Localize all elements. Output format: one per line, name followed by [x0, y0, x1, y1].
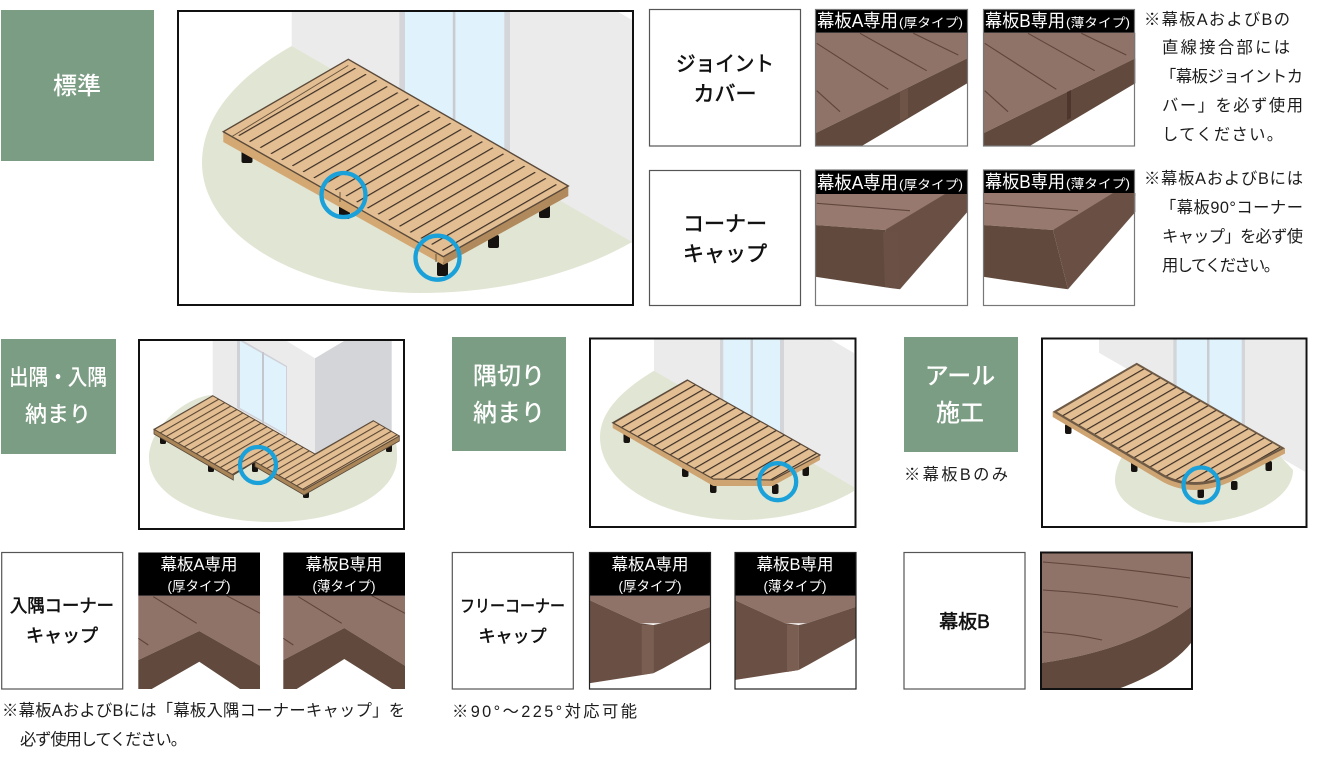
- box: フリーコーナーキャップ: キャップ: [478, 627, 546, 646]
- label: 出隅・入隅納まり: [1, 339, 116, 454]
- thumb: inner corner B: (薄タイプ): [312, 579, 376, 594]
- ring: joint: [322, 173, 366, 217]
- thumb: joint B: 幕板B専用: [985, 11, 1065, 31]
- box: 幕板B: 幕板B: [939, 611, 990, 633]
- thumb: joint B: [983, 10, 1135, 146]
- box: ジョイントカバー: [650, 10, 800, 146]
- thumb: joint A: (厚タイプ): [899, 16, 963, 30]
- thumb: inner corner B: [283, 552, 405, 689]
- note: joint cover: 「幕板ジョイントカ: [1160, 68, 1303, 86]
- wall: [1099, 339, 1305, 472]
- thumb: inner corner A: (厚タイプ): [168, 579, 230, 594]
- label: アール施工: [904, 337, 1018, 452]
- panel: chamfered deck illustration: [590, 338, 856, 527]
- wall: [213, 341, 392, 454]
- box: フリーコーナーキャップ: [452, 552, 573, 689]
- thumb: joint B: (薄タイプ): [1066, 15, 1130, 30]
- thumb: free corner A: (厚タイプ): [618, 579, 682, 594]
- ring: corner: [416, 236, 460, 280]
- panel: standard deck illustration: [178, 11, 633, 305]
- ground: [600, 371, 854, 520]
- feet: [624, 433, 809, 494]
- note: joint cover: [1144, 11, 1303, 144]
- box: 幕板B: [904, 552, 1025, 689]
- note: joint cover: してください。: [1162, 126, 1283, 144]
- thumb: corner A: [815, 170, 968, 306]
- thumb: corner A: 幕板A専用: [817, 173, 898, 193]
- deck: [613, 380, 820, 486]
- box: ジョイントカバー: ジョイント: [676, 53, 774, 76]
- box: コーナーキャップ: [650, 170, 800, 306]
- box: 入隅コーナーキャップ: キャップ: [26, 626, 98, 646]
- thumb: corner B: 幕板B専用: [985, 172, 1065, 192]
- thumb: inner corner B: 幕板B専用: [305, 555, 383, 574]
- thumb: free corner B: [735, 552, 856, 689]
- window: [1173, 339, 1245, 434]
- ring: [1184, 468, 1218, 502]
- ground: [202, 46, 632, 293]
- note: corner cap: [1144, 170, 1303, 275]
- note: joint cover: ※幕板AおよびBの: [1144, 11, 1290, 29]
- ground: [149, 395, 397, 522]
- ring: [759, 463, 796, 500]
- label: アール施工: 施工: [936, 400, 984, 427]
- thumb: free corner B: 幕板B専用: [756, 555, 834, 574]
- feet: [160, 437, 392, 498]
- panel: rounded deck illustration: [1042, 338, 1306, 527]
- note: joint cover: 直線接合部には: [1162, 39, 1290, 57]
- deck: [154, 396, 399, 495]
- box: 入隅コーナーキャップ: 入隅コーナー: [10, 596, 114, 616]
- thumb: free corner B: (薄タイプ): [764, 579, 826, 594]
- wall: [654, 339, 854, 487]
- window: [720, 339, 784, 439]
- thumb: corner B: (薄タイプ): [1066, 176, 1130, 191]
- label: 出隅・入隅納まり: 納まり: [25, 402, 91, 427]
- ring: [240, 447, 276, 483]
- ground: [1115, 440, 1293, 523]
- thumb: free corner A: [589, 552, 711, 689]
- thumb: corner A: (厚タイプ): [899, 178, 963, 192]
- thumb: joint A: 幕板A専用: [817, 11, 898, 31]
- note: inner corner cap: ※幕板AおよびBには「幕板入隅コーナーキャップ」を: [2, 702, 405, 720]
- box: ジョイントカバー: カバー: [694, 83, 756, 106]
- box: コーナーキャップ: キャップ: [683, 243, 767, 266]
- note: corner cap: キャップ」を必ず使: [1162, 228, 1303, 246]
- label: 隅切り納まり: 隅切り: [473, 363, 545, 390]
- label: 標準: 標準: [53, 73, 101, 100]
- thumb: corner B: [983, 170, 1135, 306]
- thumb: free corner A: 幕板A専用: [611, 555, 689, 574]
- note: free corner angle: ※90°～225°対応可能: [452, 703, 637, 721]
- window: [399, 11, 510, 156]
- label: 隅切り納まり: 納まり: [473, 400, 545, 427]
- panel: L-shaped deck illustration: [139, 340, 404, 529]
- thumb: joint A: [815, 10, 968, 146]
- note: joint cover: バー」を必ず使用: [1162, 97, 1303, 115]
- note: corner cap: 用してください。: [1162, 257, 1280, 275]
- feet: [242, 150, 550, 276]
- wall: [292, 11, 632, 243]
- thumb: inner corner A: 幕板A専用: [160, 555, 238, 574]
- box: 入隅コーナーキャップ: [2, 552, 123, 689]
- box: コーナーキャップ: コーナー: [683, 213, 767, 236]
- thumb: inner corner A: [138, 552, 260, 689]
- feet: [1065, 424, 1272, 498]
- label: 出隅・入隅納まり: 出隅・入隅: [9, 365, 107, 390]
- label: 標準: [1, 10, 154, 161]
- note: corner cap: ※幕板AおよびBには: [1144, 170, 1303, 188]
- note: corner cap: 「幕板90°コーナー: [1160, 199, 1303, 217]
- note: inner corner cap: [2, 702, 405, 749]
- label: 隅切り納まり: [452, 337, 566, 451]
- label: アール施工: アール: [925, 363, 995, 390]
- box: フリーコーナーキャップ: フリーコーナー: [460, 597, 565, 616]
- note: 幕板Bのみ: ※幕板Bのみ: [904, 466, 1008, 484]
- thumb: round board B: [1041, 552, 1192, 689]
- deck: [223, 59, 568, 265]
- deck: [1053, 363, 1285, 490]
- note: inner corner cap: 必ず使用してください。: [20, 731, 187, 749]
